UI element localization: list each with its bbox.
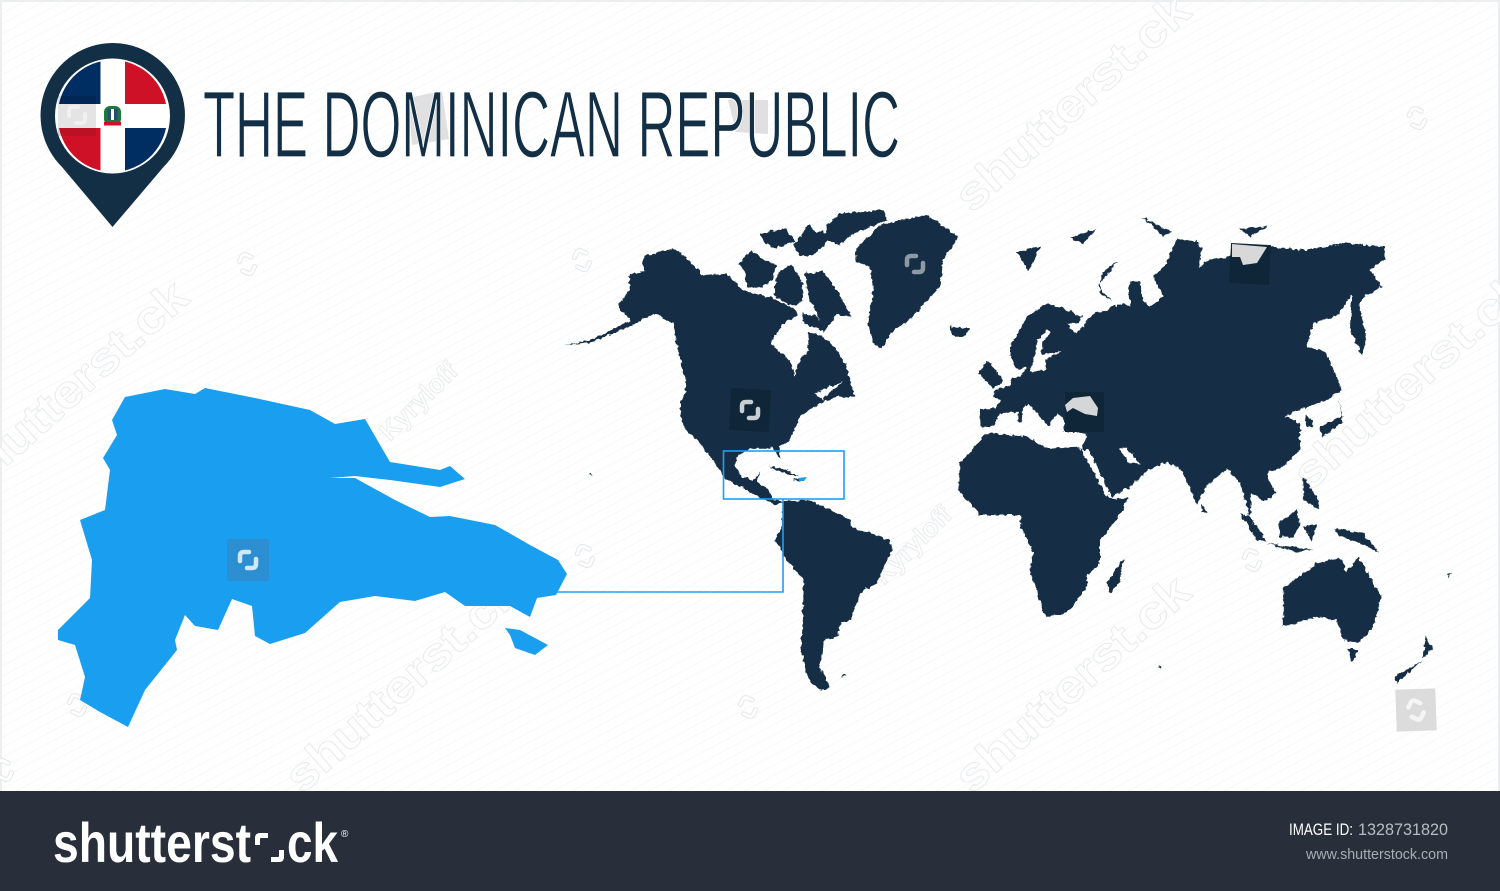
background watermarks: shutterst.ck <box>944 564 1201 802</box>
locator box and connector <box>556 451 844 592</box>
image id: IMAGE ID: <box>1289 820 1353 839</box>
footer bar <box>0 791 1500 891</box>
africa <box>958 433 1128 617</box>
website: www.shutterstock.com <box>1305 847 1448 863</box>
title: THE DOMINICAN REPUBLIC <box>203 72 900 178</box>
seas <box>1028 329 1278 498</box>
footer logo: ck <box>287 811 339 874</box>
background watermarks: Kyryloff <box>867 500 958 590</box>
background watermarks: shutterst.ck <box>944 0 1201 221</box>
eurasia africa oceania <box>950 217 1452 683</box>
footer logo: ® <box>341 829 349 840</box>
image id: 1328731820 <box>1358 820 1448 839</box>
watermark patches on map <box>729 243 1437 732</box>
eurasia <box>979 238 1385 517</box>
arctic islands <box>738 210 887 333</box>
greenland <box>855 215 958 348</box>
background watermarks: shutterst.ck <box>274 564 531 802</box>
title patches behind text <box>408 91 768 145</box>
flag of the Dominican Republic <box>59 62 166 170</box>
icon: location pin with flag <box>41 43 185 227</box>
world map <box>563 210 1452 691</box>
south america <box>775 500 892 691</box>
background watermarks: Kyryloff <box>373 356 464 446</box>
iceland <box>950 327 970 337</box>
watermark on flag <box>58 96 96 136</box>
watermark on country <box>227 539 269 581</box>
st lawrence gulf <box>813 382 843 400</box>
islands <box>950 217 1452 683</box>
country detail map: Dominican Republic <box>58 388 567 727</box>
image id <box>1289 820 1448 839</box>
footer logo: shutterst <box>53 811 251 874</box>
americas <box>563 210 970 691</box>
caribbean islands <box>589 467 847 677</box>
north america <box>563 248 855 505</box>
